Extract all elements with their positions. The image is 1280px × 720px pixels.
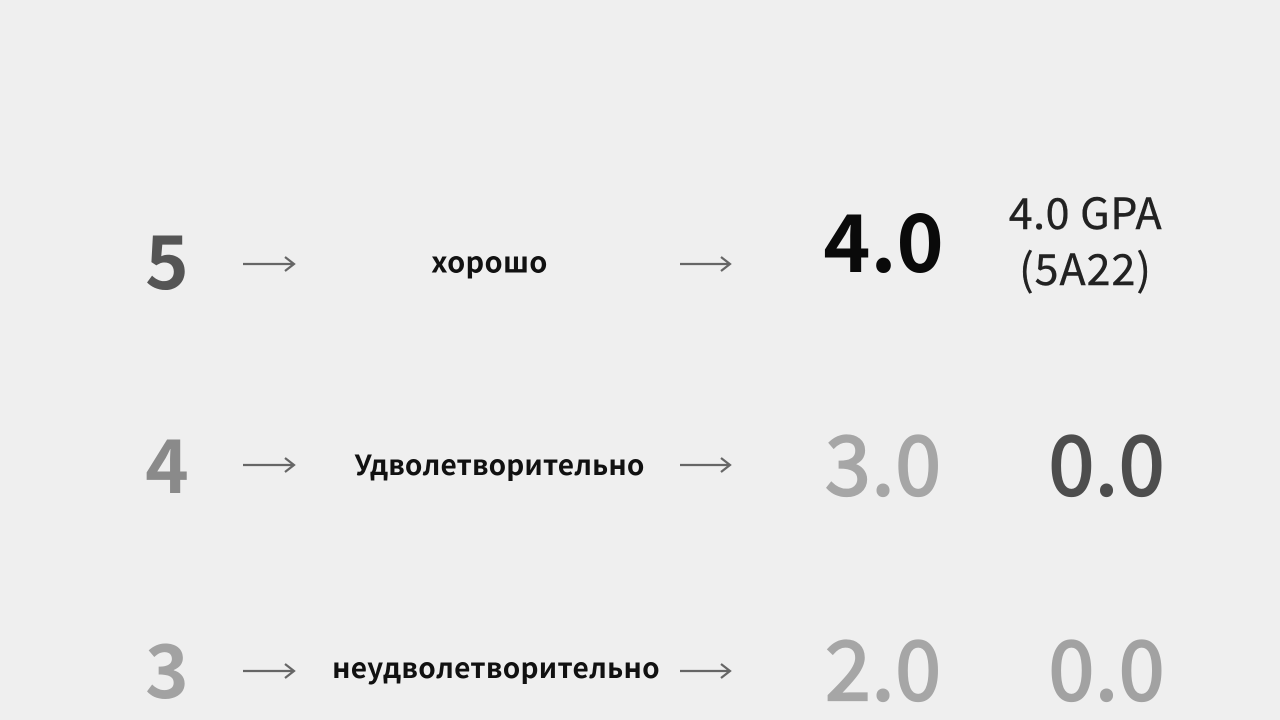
score 3.0: 3.0 (825, 400, 942, 519)
arrow: word to score (680, 256, 732, 272)
arrow: word to score (680, 457, 732, 473)
row: grade 3 (145, 605, 1165, 720)
word: good: хорошо (431, 240, 548, 282)
grade 5: 5 (145, 204, 189, 311)
score 0.0 dark: 0.0 (1049, 400, 1165, 519)
GPA note: 4.0 GPA (1009, 180, 1162, 242)
GPA note: (5A22) (1019, 236, 1152, 298)
grade 4: 4 (145, 408, 189, 515)
GPA note (1009, 180, 1162, 298)
score 4.0: 4.0 (823, 180, 944, 296)
row: grade 4 (145, 400, 1165, 519)
row: grade 5 (145, 180, 1162, 311)
grade 3: 3 (145, 613, 189, 720)
word: satisfactory: Удволетворительно (355, 444, 644, 484)
word: unsatisfactory: неудволетворительно (332, 647, 660, 687)
arrow: grade to word (243, 256, 296, 272)
arrow: grade to word (243, 663, 296, 679)
arrow: word to score (680, 663, 732, 679)
arrow: grade to word (243, 457, 296, 473)
